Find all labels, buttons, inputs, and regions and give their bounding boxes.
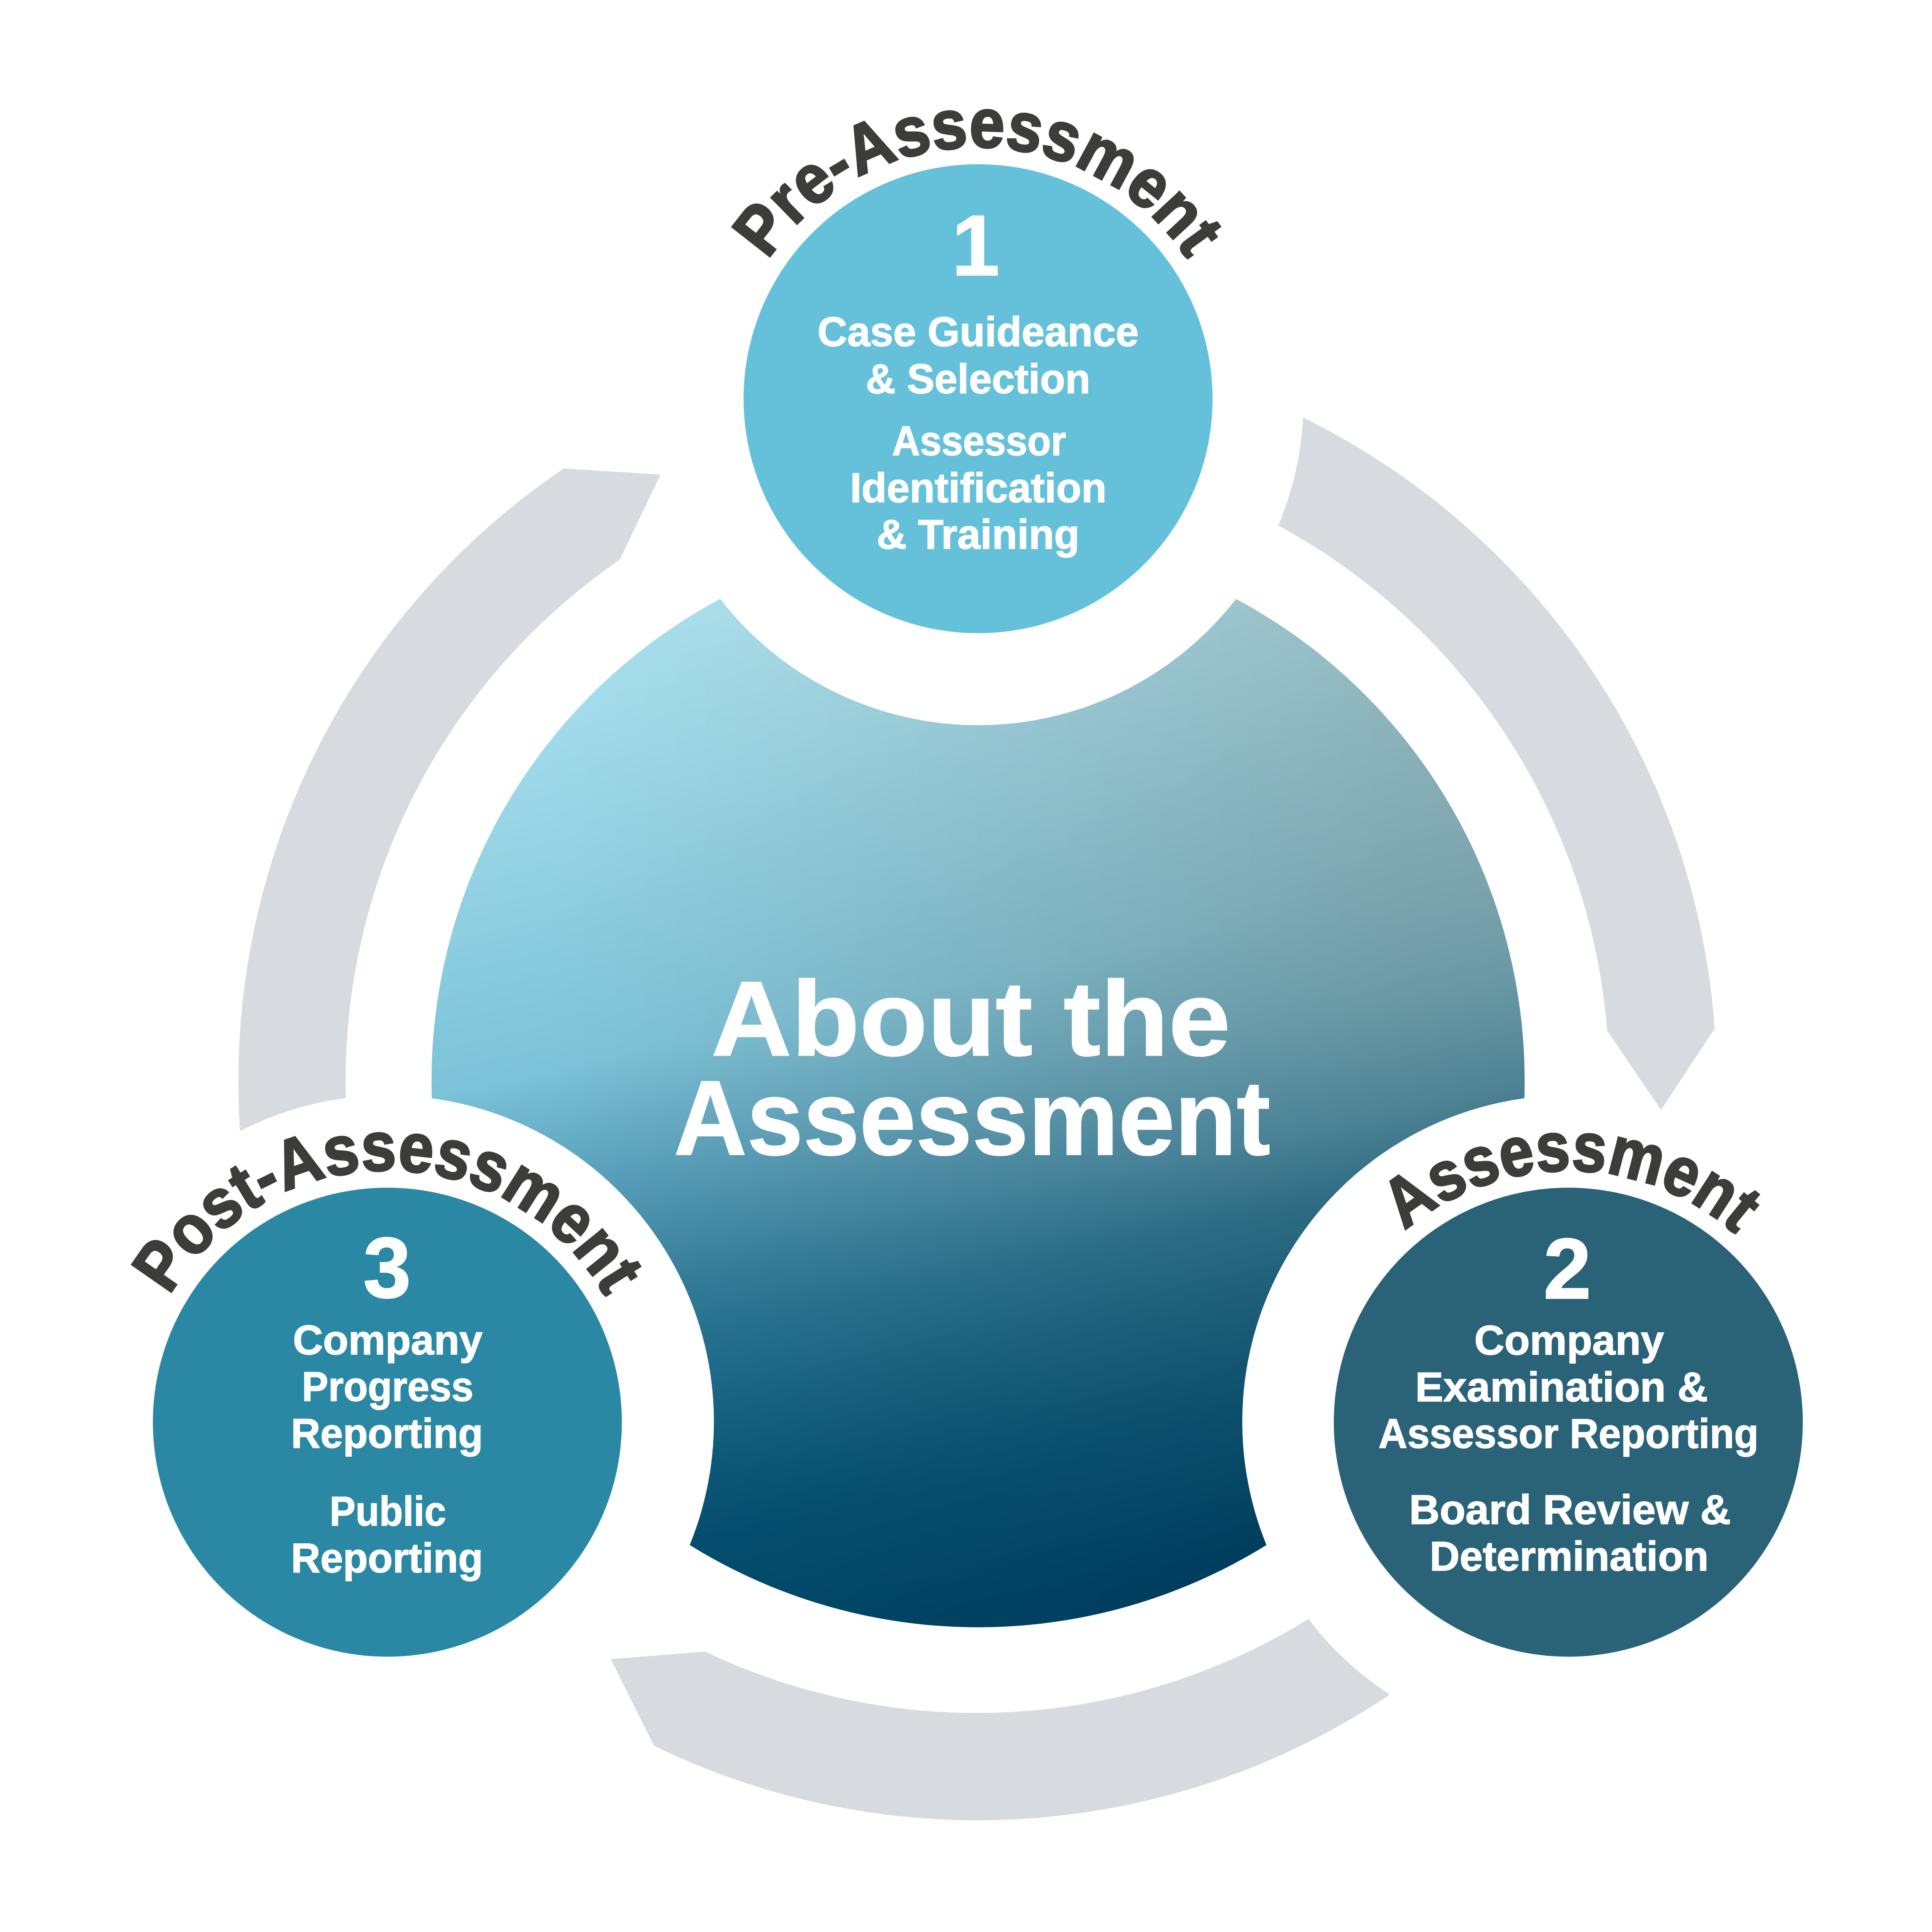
- text: company progress and public reporting: Reporting: [291, 1410, 483, 1456]
- circle: step 1: [743, 164, 1213, 633]
- panel: central gradient shape with title: [410, 580, 1546, 1642]
- text: company progress and public reporting: [291, 1317, 483, 1581]
- heading: About the Assessment: [674, 959, 1270, 1177]
- text: company examination and board review: Board Review &: [1409, 1486, 1731, 1533]
- text: company examination and board review: Examination &: [1415, 1364, 1708, 1410]
- circle: step 3: [153, 1188, 622, 1657]
- text: company progress and public reporting: Company: [293, 1317, 483, 1363]
- text: company examination and board review: Assessor Reporting: [1379, 1410, 1759, 1457]
- text: company progress and public reporting: Reporting: [291, 1535, 483, 1581]
- text: company examination and board review: Company: [1475, 1317, 1664, 1364]
- text: company progress and public reporting: Progress: [302, 1364, 473, 1410]
- central shape: [410, 580, 1546, 1642]
- text: case guidance and assessor identification: Identification: [850, 464, 1107, 511]
- arrow: grey arc from step 1 to step 2: [1278, 418, 1715, 1110]
- text: company examination and board review: [1379, 1317, 1759, 1579]
- panel: step 3 Post-Assessment: [117, 1107, 659, 1657]
- text: case guidance and assessor identification: Assessor: [892, 418, 1066, 464]
- arrow: grey arc from step 2 to step 3: [611, 1619, 1390, 1820]
- arrow: grey arc from step 3 to step 1: [238, 468, 660, 1131]
- number 3: 3: [363, 1220, 411, 1316]
- text: company progress and public reporting: Public: [330, 1488, 446, 1534]
- curved label: Pre-Assessment: Pre-Assessment: [718, 84, 1238, 269]
- number 1: 1: [952, 198, 1000, 294]
- heading: About the Assessment: Assessment: [674, 1059, 1270, 1177]
- text: case guidance and assessor identification: & Selection: [866, 356, 1090, 402]
- text: case guidance and assessor identification: Case Guideance: [818, 309, 1139, 355]
- text: company examination and board review: Determination: [1430, 1533, 1709, 1579]
- text: case guidance and assessor identification: [818, 309, 1139, 558]
- curved label: Post-Assessment: Post-Assessment: [117, 1107, 659, 1305]
- panel: step 1 Pre-Assessment: [718, 84, 1238, 633]
- text: case guidance and assessor identification: & Training: [877, 511, 1080, 558]
- circle: step 2: [1334, 1188, 1803, 1657]
- number 2: 2: [1544, 1221, 1591, 1317]
- heading: About the Assessment: About the: [711, 959, 1230, 1078]
- curved label: Assessment: Assessment: [1368, 1107, 1776, 1246]
- panel: step 2 Assessment: [1334, 1107, 1803, 1657]
